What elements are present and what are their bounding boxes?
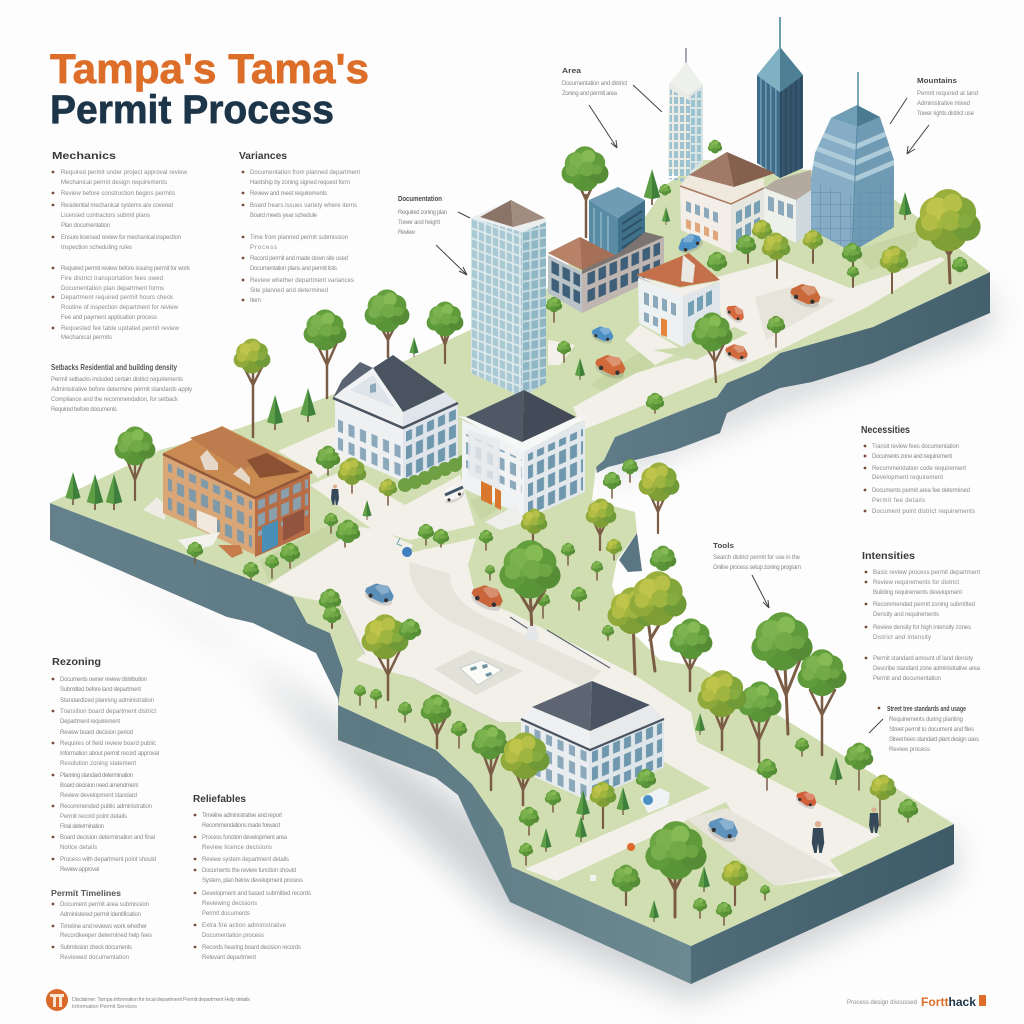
- text block: rezoning: Documents owner review distribution: [60, 677, 147, 683]
- text block: mechanics: Review before construction begins permits: [61, 191, 175, 197]
- text block: rezoning: [52, 656, 159, 873]
- text block: mechanics: Required permit review before issuing permit for work: [61, 266, 191, 272]
- annotation: tools: Online process setup zoning program: [713, 565, 801, 571]
- text block: necessities: Document point district requirements: [872, 509, 975, 515]
- annotation: documents: [398, 194, 447, 236]
- building: gray small block: [764, 170, 811, 243]
- text block: rezoning: Planning standard determination: [60, 773, 133, 779]
- road markings: [342, 610, 610, 722]
- text block: reliefables: Reliefables: [193, 793, 246, 805]
- text block: intensities: Intensities: [862, 550, 915, 562]
- cars: upper plaza and lot: [590, 279, 824, 382]
- text block: reliefables: Review licence decisions: [202, 845, 272, 851]
- car: blue lower lot: [705, 813, 742, 846]
- text block: permit timelines: Submission check documents: [60, 945, 132, 951]
- text block: variances: Site planned and determined: [250, 288, 328, 294]
- annotation: street tree standards: Street tree standards and usage: [887, 704, 966, 713]
- road inner lanes: [409, 287, 838, 886]
- text block: intensities: Building requirements development: [873, 590, 962, 596]
- building: stepped blue tower: [809, 72, 894, 248]
- building: white mansard hall: [333, 355, 458, 483]
- text block: variances: Documentation plans and permit lists: [250, 266, 337, 272]
- upper small trees: [546, 297, 785, 413]
- text block: reliefables: Documentation process: [202, 933, 264, 939]
- land shadow: [50, 290, 990, 1000]
- text block: mechanics: Requested fee table updated permit review: [61, 326, 180, 332]
- text block: rezoning: Transition board department district: [60, 709, 156, 715]
- text block: variances: Item: [250, 298, 261, 304]
- text block: setbacks paragraph: Administrative before determine permit standards apply: [51, 387, 192, 393]
- upper-left trees: [65, 289, 463, 510]
- text block: intensities: District and intensity: [873, 635, 931, 641]
- text block: mechanics: Department required permit hours check: [61, 295, 174, 301]
- trees central area: [479, 459, 679, 640]
- text block: necessities: Transit review fees documentation: [872, 444, 959, 450]
- footer text: Information Permit Services: [72, 1004, 137, 1010]
- cliff: inner sliver: [619, 533, 642, 572]
- text block: reliefables: Permit documents: [202, 911, 250, 917]
- text block: rezoning: Review approval: [60, 867, 99, 873]
- text block: intensities: Describe standard zone administrative area: [873, 666, 981, 672]
- front lawn trees: [590, 821, 770, 925]
- text block: permit timelines: Permit Timelines: [51, 889, 122, 898]
- arrows: area callouts: [589, 85, 662, 148]
- text block: mechanics: Required permit under project approval review: [61, 170, 188, 176]
- sign and pickup by front hall: [640, 788, 670, 813]
- annotation: documents: Required zoning plan: [398, 210, 447, 216]
- text block: mechanics: Inspection scheduling rules: [61, 245, 132, 251]
- annotation: mountains: Permit required at land: [917, 91, 978, 97]
- vehicles near central hall: [397, 483, 466, 557]
- annotation: street tree standards: Review process: [889, 747, 930, 753]
- back trees: [562, 140, 911, 237]
- text block: permit timelines: Reviewed documentation: [60, 955, 129, 961]
- darker lawn patches: [260, 230, 920, 585]
- upper plaza lawn: [653, 327, 748, 360]
- text block: necessities: Documents permit area fee determined: [872, 488, 970, 494]
- text block: mechanics: Routine of inspection department for review: [61, 305, 179, 311]
- text block: variances: Record permit and made down site used: [250, 256, 348, 262]
- text block: rezoning: Final determination: [60, 824, 104, 830]
- annotation: tools: Search district permit for use in the: [713, 555, 801, 561]
- cliff: left side: [50, 503, 691, 984]
- text block: permit timelines: Recordkeeper determined help fees: [60, 933, 152, 939]
- building: low-rise with brown roof: [548, 232, 664, 313]
- building: front white hall: [521, 681, 664, 801]
- trees in front of hall: [338, 458, 397, 520]
- cliff: front right side: [691, 824, 954, 984]
- cliff: upper right side: [596, 272, 990, 473]
- text block: mechanics: Residential mechanical systems are covered: [61, 203, 173, 209]
- text block: reliefables: Reviewing decisions: [202, 901, 257, 907]
- text block: permit timelines: Document permit area submission: [60, 902, 149, 908]
- text block: necessities: Development requirement: [872, 475, 943, 481]
- car: orange on curve: [468, 580, 507, 614]
- text block: setbacks paragraph: [51, 363, 192, 413]
- grass surface: [50, 160, 990, 946]
- plaza pad with map: [434, 650, 523, 695]
- text block: intensities: Recommended permit zoning submitted: [873, 602, 975, 608]
- text block: variances: Review and meet requirements: [250, 191, 327, 197]
- text block: mechanics: Mechanical permits: [61, 335, 112, 341]
- text block: reliefables: Development and based submitted records: [202, 891, 311, 897]
- text block: variances: Time from planned permit submission: [250, 235, 348, 241]
- annotation: street tree standards: Street permit to document and files: [889, 727, 974, 733]
- text block: rezoning: Department requirement: [60, 719, 120, 725]
- arrows: documents callouts: [436, 212, 470, 275]
- text block: necessities: [861, 424, 975, 515]
- car: orange lower right: [793, 787, 820, 811]
- text block: variances: Review whether department variances: [250, 278, 354, 284]
- title: [50, 45, 369, 132]
- text block: reliefables: [193, 793, 311, 961]
- text block: variances: Documentation from planned department: [250, 170, 360, 176]
- person on walkway: [331, 485, 339, 505]
- people on lower road: [812, 807, 879, 853]
- text block: intensities: Permit standard amount of land density: [873, 656, 973, 662]
- building: blue block: [589, 187, 645, 262]
- roads: [267, 257, 945, 886]
- text block: necessities: Recommendation code requirement: [872, 466, 966, 472]
- text block: necessities: Permit fee details: [872, 498, 925, 504]
- text block: rezoning: Recommended public administration: [60, 804, 152, 810]
- text block: mechanics: Fee and payment application process: [61, 315, 157, 321]
- footer logo: [46, 989, 68, 1011]
- text block: mechanics: [52, 150, 191, 341]
- arrow: tools callout: [752, 575, 769, 608]
- car: blue on road: [362, 579, 397, 609]
- building: dark blue spire tower: [757, 17, 803, 178]
- mid trees right: [707, 189, 981, 293]
- text block: intensities: Basic review process permit department: [873, 570, 980, 576]
- building: small house with orange roof: [636, 253, 720, 347]
- annotation: mountains: Mountains: [917, 76, 957, 85]
- text block: rezoning: Requires of field review board public: [60, 741, 156, 747]
- text block: mechanics: Mechanics: [52, 150, 116, 162]
- text block: rezoning: Information about permit record approval: [60, 751, 159, 757]
- text block: necessities: Documents zone and requirement: [872, 454, 952, 460]
- building: tall glass tower: [471, 200, 546, 397]
- footer credit: [847, 995, 986, 1009]
- annotation: street tree standards: Requirements during planting: [889, 717, 963, 723]
- text block: rezoning: Notice details: [60, 845, 97, 851]
- text block: variances: Process: [250, 245, 277, 251]
- text block: permit timelines: Timeline and reviews work whether: [60, 924, 147, 930]
- text block: variances: [239, 150, 360, 304]
- arrows: mountains callouts: [890, 98, 929, 154]
- building: back white tower: [668, 48, 703, 183]
- text block: rezoning: Review development standard: [60, 793, 137, 799]
- text block: rezoning: Rezoning: [52, 656, 101, 668]
- text block: intensities: Review requirements for district: [873, 580, 959, 586]
- annotation: area: [562, 66, 627, 97]
- text block: mechanics: Mechanical permit design requirements: [61, 180, 167, 186]
- text block: rezoning: Permit record point details: [60, 814, 127, 820]
- car: blue upper: [675, 230, 705, 256]
- text block: intensities: Review density for high intensity zones: [873, 625, 971, 631]
- building: white central hall: [458, 390, 586, 530]
- text block: mechanics: Documentation plan department forms: [61, 286, 164, 292]
- title: Tampa's Tama's: [50, 45, 369, 92]
- text block: mechanics: Ensure licensed review for mechanical inspection: [61, 235, 181, 241]
- text block: reliefables: Documents the review function should: [202, 868, 296, 874]
- annotation: tools: [713, 541, 801, 571]
- text block: intensities: Permit and documentation: [873, 676, 941, 682]
- text block: reliefables: Records hearing board decision records: [202, 945, 301, 951]
- annotation: area: Area: [562, 66, 582, 75]
- annotation: tools: Tools: [713, 541, 734, 550]
- text block: setbacks paragraph: Required before documents: [51, 407, 117, 413]
- annotation: documents: Documentation: [398, 194, 442, 203]
- footer text: Disclaimer: Tampa information for local department Permit department Help details: [72, 997, 250, 1003]
- text block: variances: Variances: [239, 150, 287, 162]
- text block: reliefables: Timeline administrative and report: [202, 813, 282, 819]
- text block: reliefables: Review system department details: [202, 857, 289, 863]
- annotation: street tree standards: Street trees standard plant design uses: [889, 737, 979, 743]
- building: brick apartment: [143, 426, 312, 558]
- annotation: mountains: Administrative mixed: [917, 101, 970, 107]
- text block: setbacks paragraph: Compliance and the recommendation, for setback: [51, 397, 179, 403]
- title: Permit Process: [50, 88, 334, 132]
- text block: variances: Board hears issues variety where items: [250, 203, 357, 209]
- right avenue trees: [695, 612, 918, 818]
- text block: permit timelines: Administered permit identification: [60, 912, 141, 918]
- text block: rezoning: Board decision need amendment: [60, 783, 138, 789]
- text block: rezoning: Review board decision period: [60, 730, 133, 736]
- text block: setbacks paragraph: Permit setbacks included certain district requirements: [51, 377, 183, 383]
- isometric land block: [50, 160, 990, 984]
- text block: variances: Board meets year schedule: [250, 213, 318, 219]
- text block: necessities: Necessities: [861, 424, 910, 436]
- text block: mechanics: Plan documentation: [61, 223, 110, 229]
- trees around brick apartment: [187, 446, 449, 580]
- text block: mechanics: Licensed contractors submit plans: [61, 213, 150, 219]
- annotation: area: Documentation and district: [562, 81, 627, 87]
- hedge: [398, 455, 469, 492]
- text block: variances: Hardship by zoning signed request form: [250, 180, 350, 186]
- text block: permit timelines: [51, 889, 152, 961]
- lower-left trees: [354, 685, 908, 865]
- text block: reliefables: System, plan below development process: [202, 878, 303, 884]
- text block: rezoning: Submitted before land department: [60, 687, 141, 693]
- text block: intensities: [862, 550, 981, 682]
- footer credit: Fortthack: [921, 995, 976, 1009]
- large trees middle: [319, 540, 712, 700]
- text block: intensities: Density and requirements: [873, 612, 939, 618]
- text block: rezoning: Resolution zoning statement: [60, 761, 136, 767]
- text block: reliefables: Process function development area: [202, 835, 288, 841]
- annotation: mountains: Tower rights district use: [917, 111, 975, 117]
- text block: reliefables: Extra fire action administrative: [202, 923, 287, 929]
- text block: reliefables: Recommendations made forward: [202, 823, 280, 829]
- annotation: documents: Review: [398, 230, 416, 236]
- annotation: area: Zoning and permit area: [562, 91, 618, 97]
- text block: setbacks paragraph: Setbacks Residential and building density: [51, 363, 177, 372]
- annotation: mountains: [917, 76, 978, 117]
- text block: rezoning: Standardized planning administration: [60, 698, 154, 704]
- arrow: street tree callout: [869, 719, 883, 733]
- footer text: [72, 997, 250, 1010]
- annotation: documents: Tower and height: [398, 220, 440, 226]
- text block: mechanics: Fire district transportation fees owed: [61, 276, 163, 282]
- footer credit: Process design discussed: [847, 1000, 917, 1006]
- building: brown-roof mansion: [680, 152, 775, 253]
- text block: rezoning: Process with department point should: [60, 857, 156, 863]
- annotation: street tree standards: [878, 704, 979, 753]
- text block: reliefables: Relevant department: [202, 955, 256, 961]
- text block: rezoning: Board decision determination and final: [60, 835, 155, 841]
